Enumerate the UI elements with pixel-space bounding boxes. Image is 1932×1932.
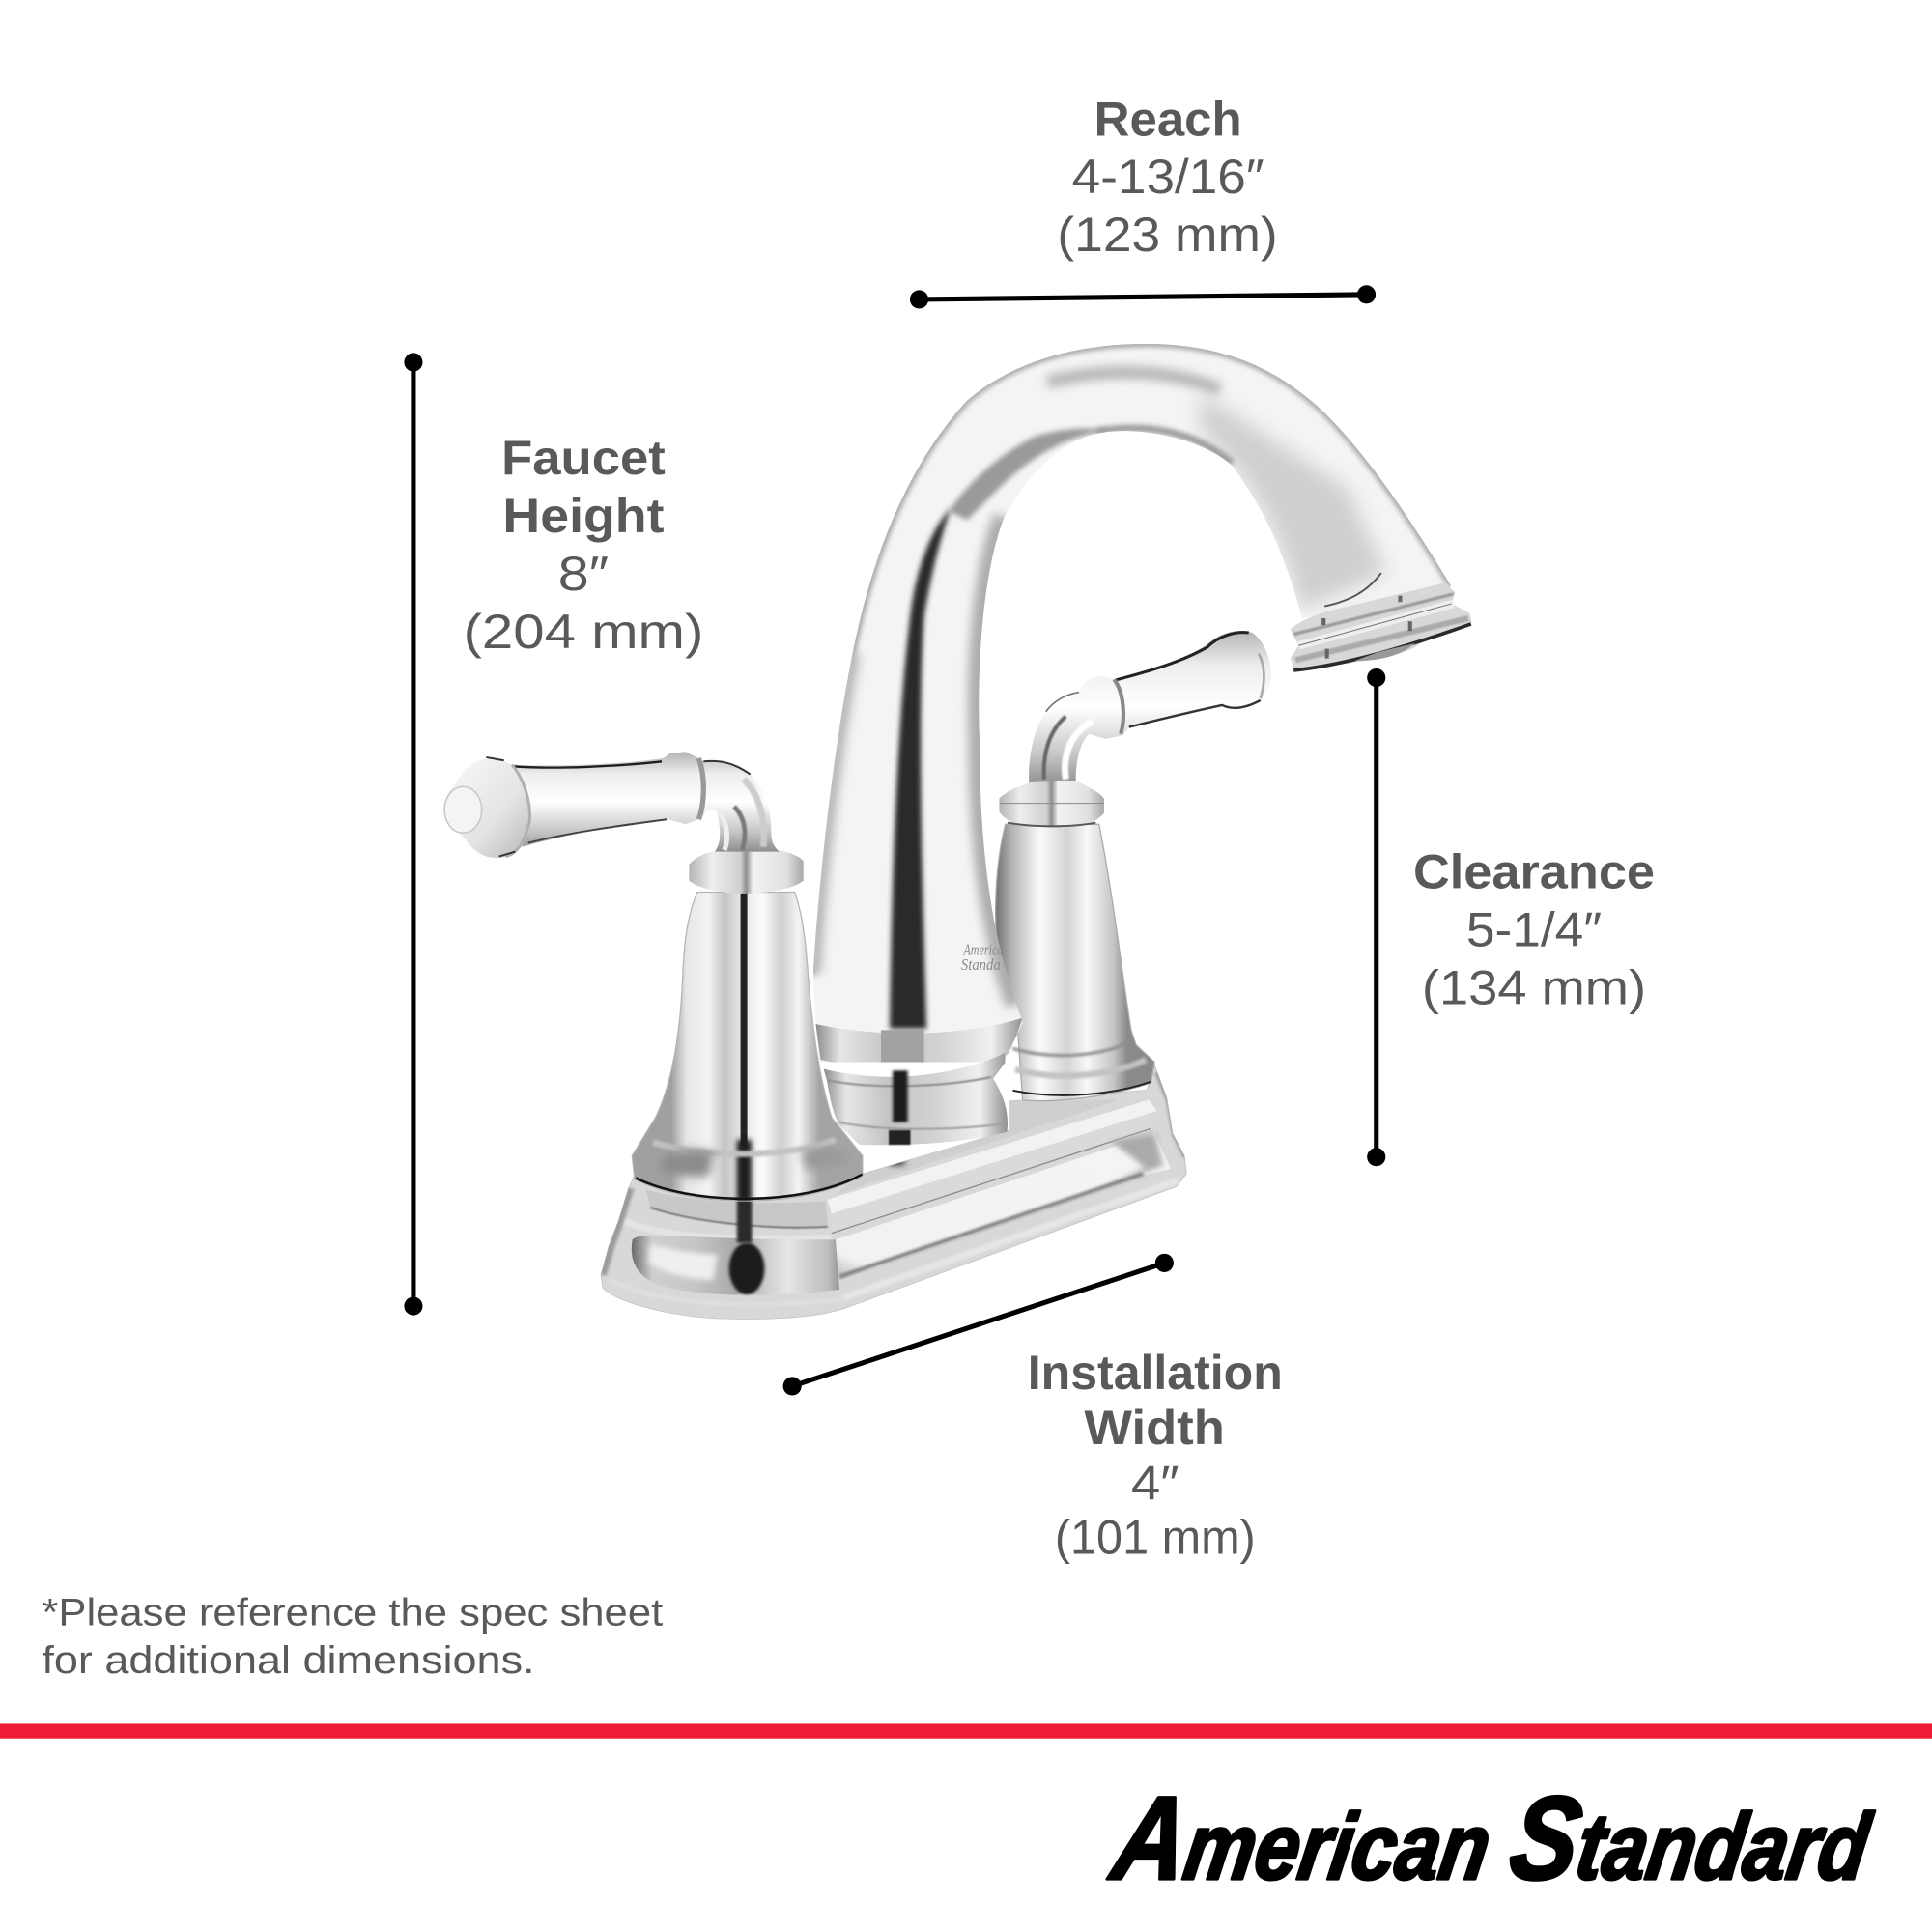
spout aerator flange [1291, 582, 1471, 671]
dimension: faucet height label: 8″ [558, 547, 609, 601]
dimension: installation width label [1028, 1346, 1283, 1564]
left lever handle [444, 752, 780, 858]
right lever handle [999, 631, 1271, 826]
dimension: clearance label: Clearance [1413, 845, 1655, 899]
dimension: installation width label: 4″ [1131, 1456, 1179, 1510]
spout logo mark: Standa [961, 955, 1001, 974]
arrow: installation width dimension line [783, 1254, 1174, 1396]
spout logo mark: America [963, 941, 1003, 959]
arrow: clearance dimension line [1367, 668, 1385, 1166]
spout [813, 344, 1471, 1145]
dimension: installation width label: Width [1084, 1401, 1225, 1455]
footnote: *Please reference the spec sheet [42, 1591, 663, 1634]
dimension: clearance label: 5-1/4″ [1466, 903, 1602, 957]
dimension: installation width label: Installation [1028, 1346, 1283, 1400]
dimension: clearance label: (134 mm) [1422, 961, 1646, 1015]
logo: American Standard wordmark: American Standard [1102, 1773, 1882, 1905]
footnote [42, 1591, 663, 1682]
handle end knob [444, 758, 530, 858]
illustration: chrome faucet [444, 344, 1471, 1320]
dimension: faucet height label: Faucet [501, 431, 666, 485]
spout logo mark [961, 941, 1003, 974]
dimension: reach label: Reach [1094, 92, 1242, 146]
dimension: reach label [1057, 92, 1278, 262]
spout collar band [815, 1018, 1022, 1063]
dimension: clearance label [1413, 845, 1655, 1015]
right handle cap [999, 781, 1104, 826]
right handle body [996, 824, 1154, 1101]
spout collar [824, 1053, 1008, 1145]
dimension: reach label: (123 mm) [1057, 208, 1278, 262]
dimension: faucet height label [464, 431, 703, 659]
arrow: faucet height dimension line [404, 353, 423, 1316]
arrow: reach dimension line [910, 285, 1376, 309]
red divider bar [0, 1723, 1932, 1739]
left handle cap [689, 850, 804, 894]
dimension: faucet height label: (204 mm) [464, 605, 703, 659]
footnote: for additional dimensions. [42, 1639, 535, 1682]
dimension: installation width label: (101 mm) [1055, 1510, 1256, 1564]
faucet base plate [601, 1065, 1186, 1320]
left handle body [632, 850, 863, 1202]
dimension: reach label: 4-13/16″ [1072, 150, 1264, 204]
dimension: faucet height label: Height [502, 489, 664, 543]
